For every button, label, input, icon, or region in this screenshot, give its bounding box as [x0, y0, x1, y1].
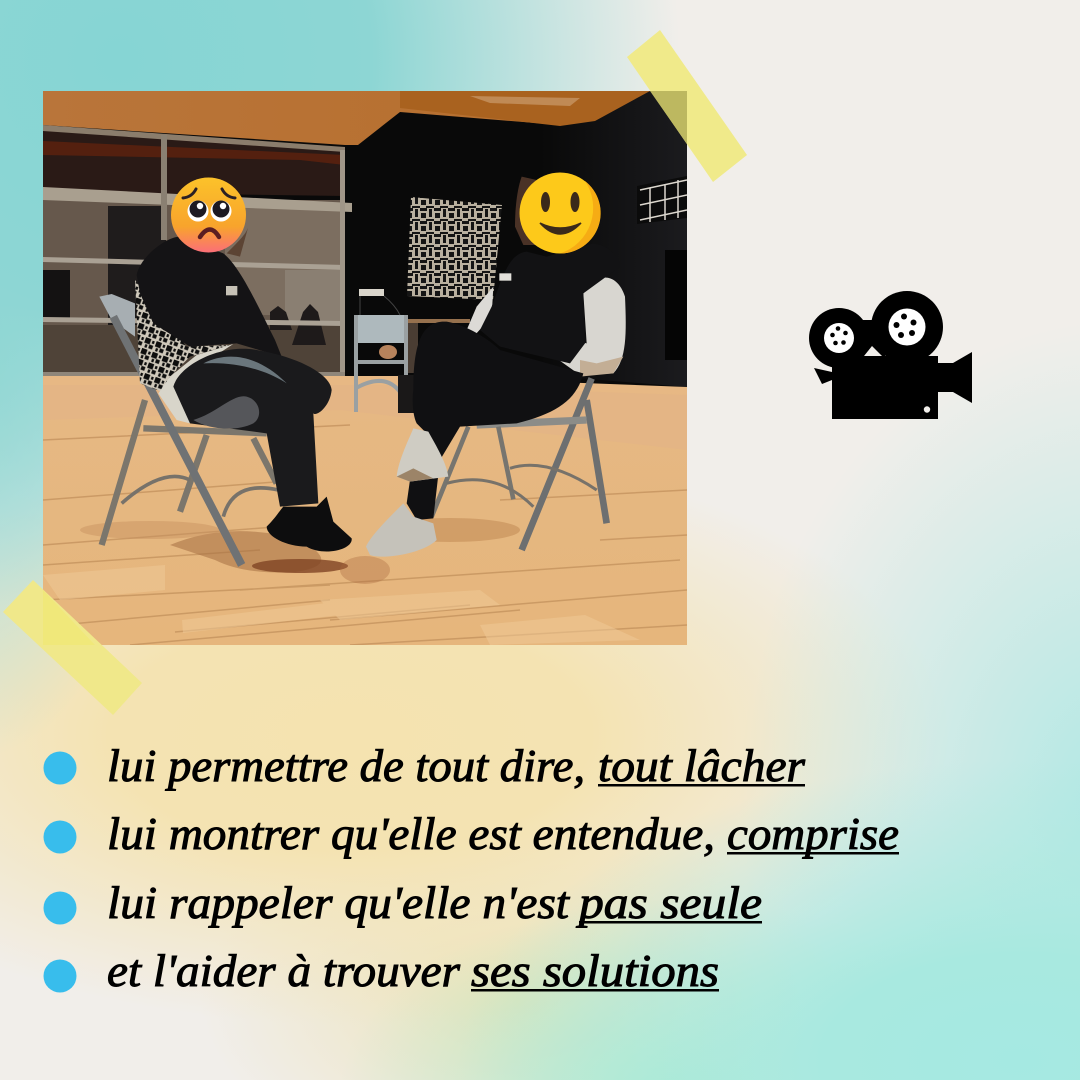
wooden ceiling: [43, 91, 650, 145]
photo: two people sitting on chairs in a studio: [43, 91, 687, 645]
line 1 text: tout lâcher: [598, 741, 806, 791]
line 1 text: lui permettre de tout dire,: [107, 741, 585, 791]
bullet 4: [44, 960, 76, 992]
line 2 text: comprise: [727, 809, 899, 859]
line 4 text: [107, 946, 719, 996]
line 3 text: lui rappeler qu'elle n'est: [107, 878, 571, 928]
bullet list: [44, 741, 899, 996]
wall artwork: [407, 197, 502, 300]
yellow tape bottom left: [3, 580, 142, 715]
background chair: [356, 289, 470, 413]
line 2 text: lui montrer qu'elle est entendue,: [107, 809, 715, 859]
emoji: pleading face: [171, 178, 246, 252]
left person on chair: [99, 227, 352, 565]
bullet 3: [44, 892, 76, 924]
line 4 text: et l'aider à trouver: [107, 946, 460, 996]
right person on chair: [366, 177, 626, 557]
bullet 1: [44, 752, 76, 784]
icon: film camera: [809, 291, 972, 419]
line 3 text: pas seule: [576, 878, 762, 928]
glass wall with reflections: [43, 125, 352, 378]
emoji: smiling face: [520, 172, 601, 254]
bullet 2: [44, 820, 76, 854]
line 4 text: ses solutions: [471, 946, 719, 996]
small artwork right: [637, 176, 687, 360]
wooden floor: [43, 376, 687, 645]
line 1 text: [107, 741, 806, 791]
yellow tape top right: [627, 30, 747, 182]
line 3 text: [107, 878, 762, 928]
seated people seen through the glass: [270, 304, 326, 345]
